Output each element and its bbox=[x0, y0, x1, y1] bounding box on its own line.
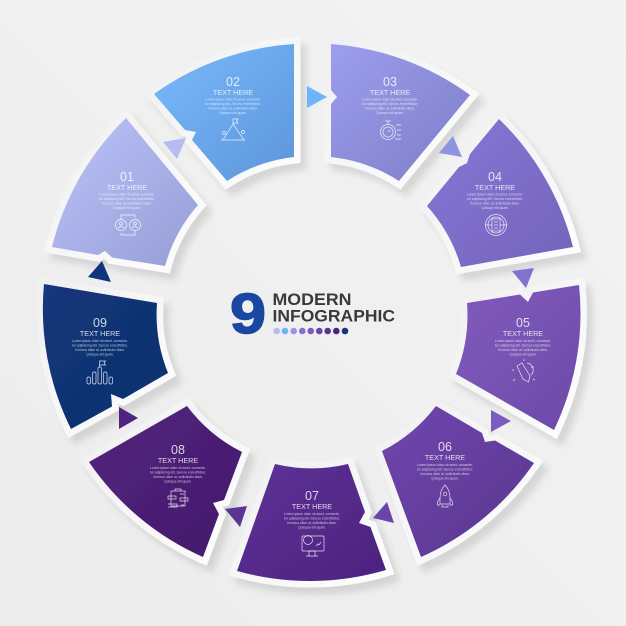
text 03: Lorem ipsum dolor sit amet, consecte- bbox=[362, 98, 418, 102]
arrow 8 to 9 bbox=[119, 407, 138, 429]
text 02: Lorem ipsum dolor sit amet, consecte- bbox=[205, 98, 261, 102]
text 05 bbox=[495, 316, 551, 356]
colour dots bbox=[273, 328, 348, 334]
heading: INFOGRAPHIC bbox=[272, 308, 395, 326]
text 02: rhoncus diam at, sollicitudin diam. bbox=[208, 106, 258, 110]
text 04: tur adipiscing elit. Sed eu erat efficitur, bbox=[467, 197, 523, 201]
text 03: TEXT HERE bbox=[370, 88, 410, 97]
text 06 bbox=[417, 440, 473, 480]
segment 09 bbox=[43, 284, 168, 429]
text 08: rhoncus diam at, sollicitudin diam. bbox=[153, 475, 203, 479]
text 09: rhoncus diam at, sollicitudin diam. bbox=[75, 348, 125, 352]
icon: stopwatch bbox=[380, 121, 401, 140]
segment 01 bbox=[52, 118, 198, 266]
icon: pencil idea bbox=[512, 359, 535, 382]
arrow 1 to 2 bbox=[163, 138, 186, 159]
text 08: tur adipiscing elit. Sed eu erat efficitur, bbox=[150, 470, 206, 474]
segment 08 bbox=[89, 406, 242, 557]
segment 07 bbox=[237, 464, 386, 581]
text 09: Lorem ipsum dolor sit amet, consecte- bbox=[72, 339, 128, 343]
text 04: TEXT HERE bbox=[475, 183, 515, 192]
text 05: TEXT HERE bbox=[503, 329, 543, 338]
segment 03 bbox=[331, 44, 470, 181]
text 03: rhoncus diam at, sollicitudin diam. bbox=[365, 106, 415, 110]
text 07 bbox=[284, 489, 340, 530]
icon: rocket bbox=[438, 485, 452, 507]
text 01: Lorem ipsum dolor sit amet, consecte- bbox=[99, 192, 155, 196]
icon: bars flag bbox=[87, 361, 112, 384]
segment 02 bbox=[154, 44, 294, 181]
text 05: 05 bbox=[516, 316, 530, 330]
text 04: 04 bbox=[488, 170, 502, 184]
text 07: rhoncus diam at, sollicitudin diam. bbox=[287, 521, 337, 525]
text 01: 01 bbox=[120, 170, 134, 184]
segment 05 bbox=[456, 285, 580, 430]
text 01: rhoncus diam at, sollicitudin diam. bbox=[102, 202, 152, 206]
text 09 bbox=[72, 316, 128, 356]
big number 9: 9 bbox=[230, 282, 266, 346]
icon: monitor with gear bbox=[302, 536, 324, 556]
text 08 bbox=[150, 443, 206, 484]
text 05: tur adipiscing elit. Sed eu erat efficitur, bbox=[495, 344, 551, 348]
text 08: Quisque elit quam. bbox=[164, 480, 192, 484]
segment 04 bbox=[427, 119, 573, 267]
text 09: 09 bbox=[93, 316, 107, 330]
text 02: tur adipiscing elit. Sed eu erat efficitur, bbox=[205, 102, 261, 106]
text 02: Quisque elit quam. bbox=[219, 111, 247, 115]
text 03 bbox=[362, 75, 418, 115]
text 01 bbox=[99, 170, 155, 210]
text 07: Lorem ipsum dolor sit amet, consecte- bbox=[284, 512, 340, 516]
segment 06 bbox=[382, 406, 534, 557]
text 03: 03 bbox=[383, 75, 397, 89]
arrow 2 to 3 bbox=[307, 86, 327, 108]
text 02: TEXT HERE bbox=[213, 88, 253, 97]
text 03: tur adipiscing elit. Sed eu erat efficitur, bbox=[362, 102, 418, 106]
text 09: TEXT HERE bbox=[80, 329, 120, 338]
text 02: 02 bbox=[226, 75, 240, 89]
text 03: Quisque elit quam. bbox=[376, 111, 404, 115]
arrow 7 to 8 bbox=[225, 506, 247, 527]
text 09: Quisque elit quam. bbox=[86, 352, 114, 356]
text 07: TEXT HERE bbox=[292, 502, 332, 511]
text 01: TEXT HERE bbox=[107, 183, 147, 192]
arrow 6 to 7 bbox=[373, 502, 394, 523]
arrow 9 to 1 bbox=[88, 261, 111, 282]
text 05: Quisque elit quam. bbox=[509, 352, 537, 356]
text 06: tur adipiscing elit. Sed eu erat efficitur, bbox=[417, 468, 473, 472]
heading bbox=[272, 291, 395, 326]
text 06: TEXT HERE bbox=[425, 453, 465, 462]
text 06: rhoncus diam at, sollicitudin diam. bbox=[420, 472, 470, 476]
icon: people exchange bbox=[116, 215, 140, 235]
text 06: 06 bbox=[438, 440, 452, 454]
icon: mountain flag bbox=[221, 119, 245, 140]
text 01: tur adipiscing elit. Sed eu erat efficitur, bbox=[99, 197, 155, 201]
text 04: rhoncus diam at, sollicitudin diam. bbox=[470, 202, 520, 206]
arrow 3 to 4 bbox=[439, 136, 462, 157]
text 04: Lorem ipsum dolor sit amet, consecte- bbox=[467, 192, 523, 196]
text 08: TEXT HERE bbox=[158, 456, 198, 465]
text 07: Quisque elit quam. bbox=[298, 526, 326, 530]
text 07: 07 bbox=[305, 489, 319, 503]
text 07: tur adipiscing elit. Sed eu erat efficitur, bbox=[284, 516, 340, 520]
heading: MODERN bbox=[272, 291, 352, 309]
text 09: tur adipiscing elit. Sed eu erat efficitur, bbox=[72, 344, 128, 348]
text 08: 08 bbox=[171, 443, 185, 457]
text 05: rhoncus diam at, sollicitudin diam. bbox=[498, 348, 548, 352]
text 04 bbox=[467, 170, 523, 210]
icon: clipboard bbox=[168, 489, 188, 507]
text 05: Lorem ipsum dolor sit amet, consecte- bbox=[495, 339, 551, 343]
icon: target document bbox=[485, 214, 507, 236]
text 06: Lorem ipsum dolor sit amet, consecte- bbox=[417, 463, 473, 467]
text 04: Quisque elit quam. bbox=[481, 206, 509, 210]
center title bbox=[230, 282, 395, 346]
text 08: Lorem ipsum dolor sit amet, consecte- bbox=[150, 466, 206, 470]
text 01: Quisque elit quam. bbox=[113, 206, 141, 210]
text 02 bbox=[205, 75, 261, 115]
arrow 4 to 5 bbox=[512, 268, 534, 288]
arrow 5 to 6 bbox=[491, 410, 511, 432]
text 06: Quisque elit quam. bbox=[431, 476, 459, 480]
